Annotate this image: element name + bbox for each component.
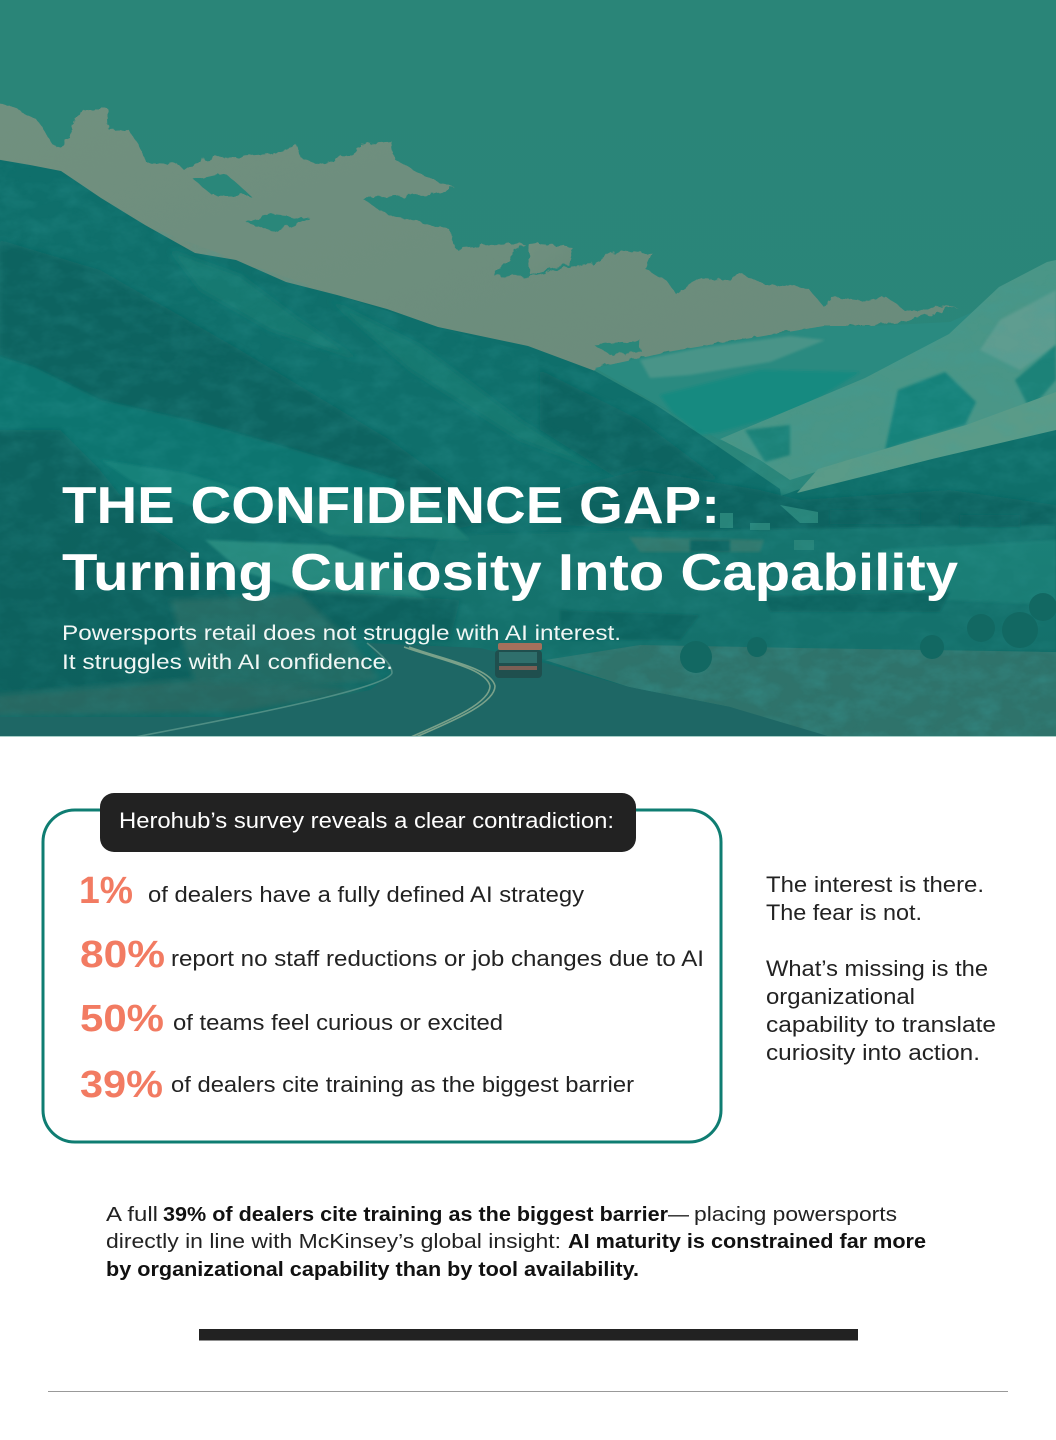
title: THE CONFIDENCE GAP:: [62, 477, 720, 535]
subtitle: Powersports retail does not struggle with AI interest.: [62, 621, 621, 645]
left big mountain: [0, 159, 790, 737]
subtitle: It struggles with AI confidence.: [62, 650, 393, 674]
stat: 39%: of dealers cite training as the biggest barrier: [171, 1072, 634, 1097]
conclusion text: by organizational capability than by tool availability.: [106, 1258, 639, 1281]
conclusion text: A full: [106, 1203, 158, 1226]
light foothill ridge and right slope: [782, 430, 1056, 652]
clouds: [0, 104, 958, 370]
panel heading: [100, 793, 636, 852]
vehicle: [495, 643, 542, 678]
conclusion text: —: [668, 1203, 690, 1226]
valley floor: [562, 480, 1056, 617]
subtitle: [62, 621, 621, 674]
side note: What’s missing is the: [766, 956, 988, 981]
side note: The interest is there.: [766, 872, 984, 897]
stat: 80%: report no staff reductions or job changes due to AI: [171, 946, 704, 971]
left trees and hills: [0, 430, 470, 716]
conclusion text: 39% of dealers cite training as the biggest barrier: [163, 1203, 668, 1226]
title: Turning Curiosity Into Capability: [62, 544, 958, 602]
conclusion text: [106, 1203, 926, 1281]
panel: survey statistics: [43, 793, 721, 1142]
right mountain: [720, 260, 1056, 480]
conclusion text: placing powersports: [694, 1203, 897, 1226]
far mountains: [595, 326, 875, 369]
side note: organizational: [766, 984, 915, 1009]
stat: 80%: [80, 934, 704, 976]
stat: 1%: [79, 870, 584, 912]
stat: 1%: of dealers have a fully defined AI strategy: [148, 882, 584, 907]
stat: 50%: of teams feel curious or excited: [173, 1010, 503, 1035]
road: [0, 643, 831, 745]
stat: 80%: 80%: [80, 934, 165, 976]
stat: 39%: [80, 1064, 634, 1106]
side note: curiosity into action.: [766, 1040, 980, 1065]
conclusion text: AI maturity is constrained far more: [568, 1230, 926, 1253]
conclusion text: directly in line with McKinsey’s global insight:: [106, 1230, 561, 1253]
stat: 39%: 39%: [80, 1064, 163, 1106]
roadside grass: [540, 640, 1056, 740]
footer rule: [48, 1391, 1008, 1392]
foothill: [0, 358, 396, 513]
title: [62, 477, 958, 602]
hero background: mountain road landscape: [0, 0, 1056, 745]
trees right: [680, 593, 1056, 673]
stat: 50%: [80, 998, 503, 1040]
side note: capability to translate: [766, 1012, 996, 1037]
stat: 1%: 1%: [79, 870, 133, 912]
texture: [2, 187, 1054, 708]
side note: [766, 872, 996, 1065]
dark divider bar: [199, 1329, 858, 1340]
side note: The fear is not.: [766, 900, 922, 925]
panel heading: Herohub’s survey reveals a clear contradiction:: [119, 808, 614, 833]
stat: 50%: 50%: [80, 998, 164, 1040]
